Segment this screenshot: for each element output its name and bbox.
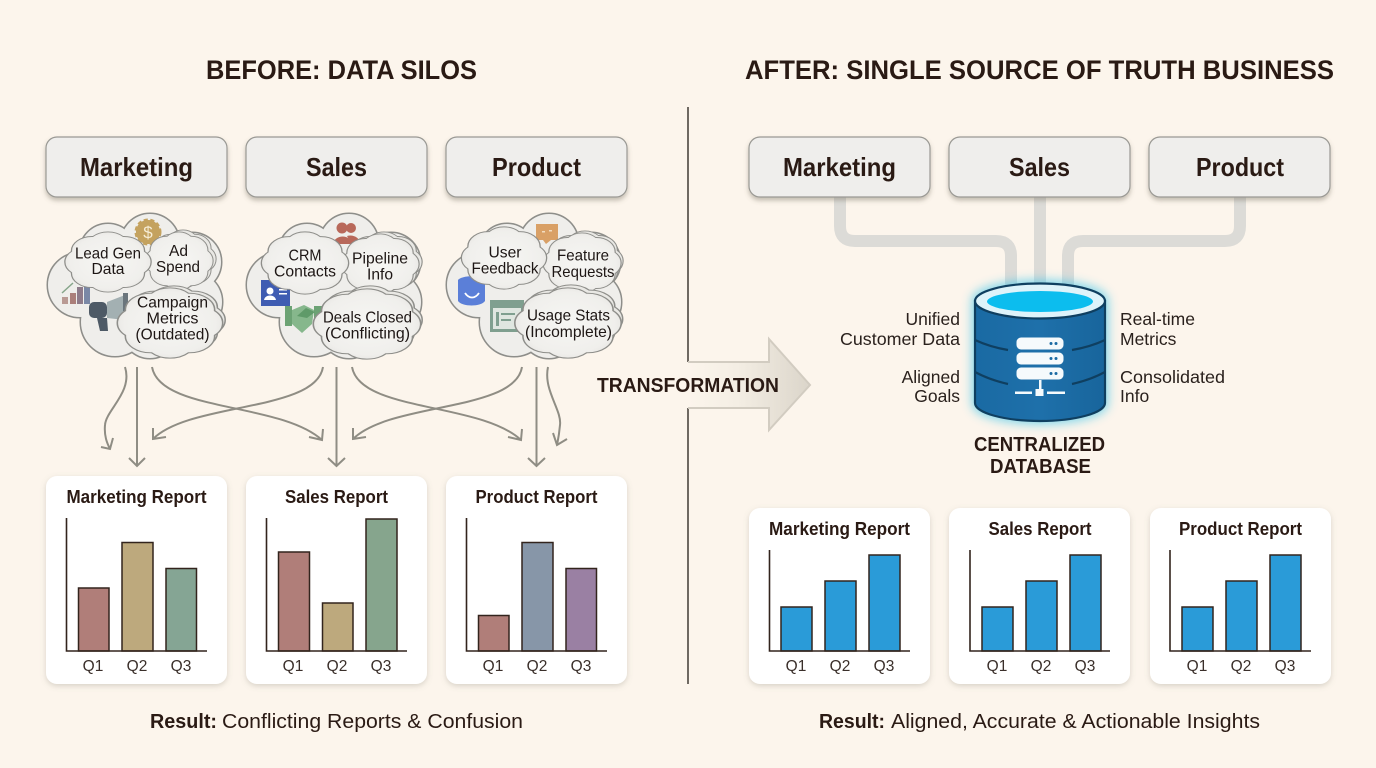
- chart: marketing report after: [749, 508, 930, 684]
- chart: marketing report before: Q2: [127, 658, 147, 675]
- panel: before department headers: [46, 137, 627, 197]
- chart: product report after: Q2: [1231, 658, 1251, 675]
- header: sales: Sales: [306, 152, 367, 182]
- cloud: deals closed: [313, 286, 422, 359]
- connectors: departments to database: [840, 197, 1240, 290]
- chart: product report before: [446, 476, 627, 684]
- cloud: pipeline info: Pipeline: [352, 250, 408, 268]
- cloud: pipeline info: Info: [367, 266, 393, 284]
- icon: server stack: [1015, 338, 1065, 396]
- chart: sales report after: [949, 508, 1130, 684]
- icon: dollar badge: $: [143, 223, 153, 242]
- cloud: usage stats: (Incomplete): [525, 324, 612, 341]
- cloud: lead gen data: [65, 232, 151, 292]
- icon: contact card: [261, 280, 290, 306]
- chart: marketing report after: Q1: [786, 658, 806, 675]
- cloud: campaign metrics: Campaign: [137, 294, 208, 312]
- cloud: feature requests: Requests: [552, 264, 614, 281]
- database labels: left: Unified: [906, 309, 960, 329]
- database caption: [974, 434, 1105, 478]
- chart: product report after: Product Report: [1179, 519, 1302, 539]
- chart: sales report before: Q3: [371, 658, 391, 675]
- database labels: right: Metrics: [1120, 329, 1177, 349]
- cloud: crm contacts: CRM: [288, 248, 322, 264]
- chart: marketing report before: [46, 476, 227, 684]
- cloud: pipeline info: [341, 232, 422, 294]
- database caption: DATABASE: [990, 456, 1091, 478]
- header: marketing: Marketing: [80, 152, 193, 182]
- database labels: left: [840, 309, 960, 406]
- database labels: left: Aligned: [902, 367, 960, 387]
- chart: marketing report after: Q3: [874, 658, 894, 675]
- database labels: right: Real-time: [1120, 309, 1195, 329]
- chart: sales report before: Sales Report: [285, 487, 388, 507]
- database labels: right: [1120, 309, 1225, 406]
- divider and transformation arrow: TRANSFORMATION: [597, 375, 779, 397]
- result: before: Result:: [150, 710, 217, 733]
- header: product: Product: [492, 152, 581, 182]
- cloud: deals closed: Deals Closed: [323, 310, 412, 326]
- header: product: Product: [1196, 152, 1284, 182]
- icon: centralized database cylinder: [975, 283, 1105, 421]
- cloud: user feedback: [461, 227, 547, 289]
- cloud: campaign metrics: Metrics: [146, 310, 198, 328]
- database labels: left: Goals: [914, 386, 960, 406]
- database caption: CENTRALIZED: [974, 434, 1105, 456]
- icon: handshake: [285, 305, 322, 333]
- chart: sales report after: Q2: [1031, 658, 1051, 675]
- cloud: usage stats: Usage Stats: [527, 308, 610, 324]
- header: marketing: Marketing: [783, 152, 896, 182]
- panel: after department headers: [749, 137, 1330, 197]
- header: product: [446, 137, 627, 197]
- result: after: Result:: [819, 710, 885, 733]
- chart: product report before: Q3: [571, 658, 591, 675]
- chart: product report before: Product Report: [476, 487, 598, 507]
- chart: product report before: Q2: [527, 658, 547, 675]
- divider and transformation arrow: [597, 107, 810, 684]
- arrows: tangled flows to reports: [101, 367, 567, 466]
- result: after: Aligned, Accurate & Actionable Insights: [891, 710, 1260, 733]
- chart: sales report before: [246, 476, 427, 684]
- header: marketing: [749, 137, 930, 197]
- chart: sales report before: Q2: [327, 658, 347, 675]
- title: before: BEFORE: DATA SILOS: [206, 55, 477, 85]
- cloud: ad spend: Ad: [169, 243, 188, 260]
- chart: marketing report before: Q1: [83, 658, 103, 675]
- header: product: [1149, 137, 1330, 197]
- chart: marketing report before: Q3: [171, 658, 191, 675]
- database labels: right: Info: [1120, 386, 1149, 406]
- cloud: ad spend: [145, 230, 216, 290]
- icon: browser window: [490, 300, 524, 332]
- cloud: ad spend: Spend: [156, 259, 200, 276]
- result: before: Conflicting Reports & Confusion: [222, 710, 523, 733]
- cloud: product silo: [447, 214, 623, 358]
- cloud: lead gen data: Data: [92, 261, 125, 278]
- cloud: marketing silo: [48, 214, 225, 358]
- chart: sales report after: Q1: [987, 658, 1007, 675]
- chart: product report after: [1150, 508, 1331, 684]
- header: sales: [246, 137, 427, 197]
- chart: marketing report before: Marketing Report: [66, 487, 206, 507]
- cloud: campaign metrics: [117, 286, 225, 358]
- icon: dollar badge: [136, 220, 160, 244]
- cloud: sales silo: [247, 214, 422, 359]
- chart: sales report after: Q3: [1075, 658, 1095, 675]
- icon: bar chart: [62, 283, 90, 304]
- icon: chat bubble: [536, 224, 558, 244]
- chart: marketing report after: Q2: [830, 658, 850, 675]
- cloud: usage stats: [515, 285, 623, 358]
- icon: people: [333, 222, 360, 244]
- chart: product report before: Q1: [483, 658, 503, 675]
- icon: smile cylinder: [458, 276, 485, 306]
- cloud: campaign metrics: (Outdated): [136, 326, 210, 344]
- cloud: deals closed: (Conflicting): [325, 326, 410, 342]
- cloud: user feedback: User: [488, 244, 522, 262]
- cloud: feature requests: [543, 231, 623, 293]
- cloud: crm contacts: Contacts: [274, 264, 336, 280]
- header: sales: [949, 137, 1130, 197]
- chart: product report after: Q1: [1187, 658, 1207, 675]
- icon: megaphone: [89, 293, 128, 331]
- cloud: user feedback: Feedback: [472, 260, 539, 278]
- chart: sales report before: Q1: [283, 658, 303, 675]
- chart: marketing report after: Marketing Report: [769, 519, 910, 539]
- header: marketing: [46, 137, 227, 197]
- cloud: crm contacts: [261, 232, 349, 294]
- title: after: AFTER: SINGLE SOURCE OF TRUTH BUSINESS: [745, 55, 1334, 85]
- database labels: right: Consolidated: [1120, 367, 1225, 387]
- header: sales: Sales: [1009, 152, 1070, 182]
- chart: product report after: Q3: [1275, 658, 1295, 675]
- cloud: feature requests: Feature: [557, 248, 609, 264]
- cloud: lead gen data: Lead Gen: [75, 246, 141, 262]
- database labels: left: Customer Data: [840, 329, 960, 349]
- chart: sales report after: Sales Report: [988, 519, 1092, 539]
